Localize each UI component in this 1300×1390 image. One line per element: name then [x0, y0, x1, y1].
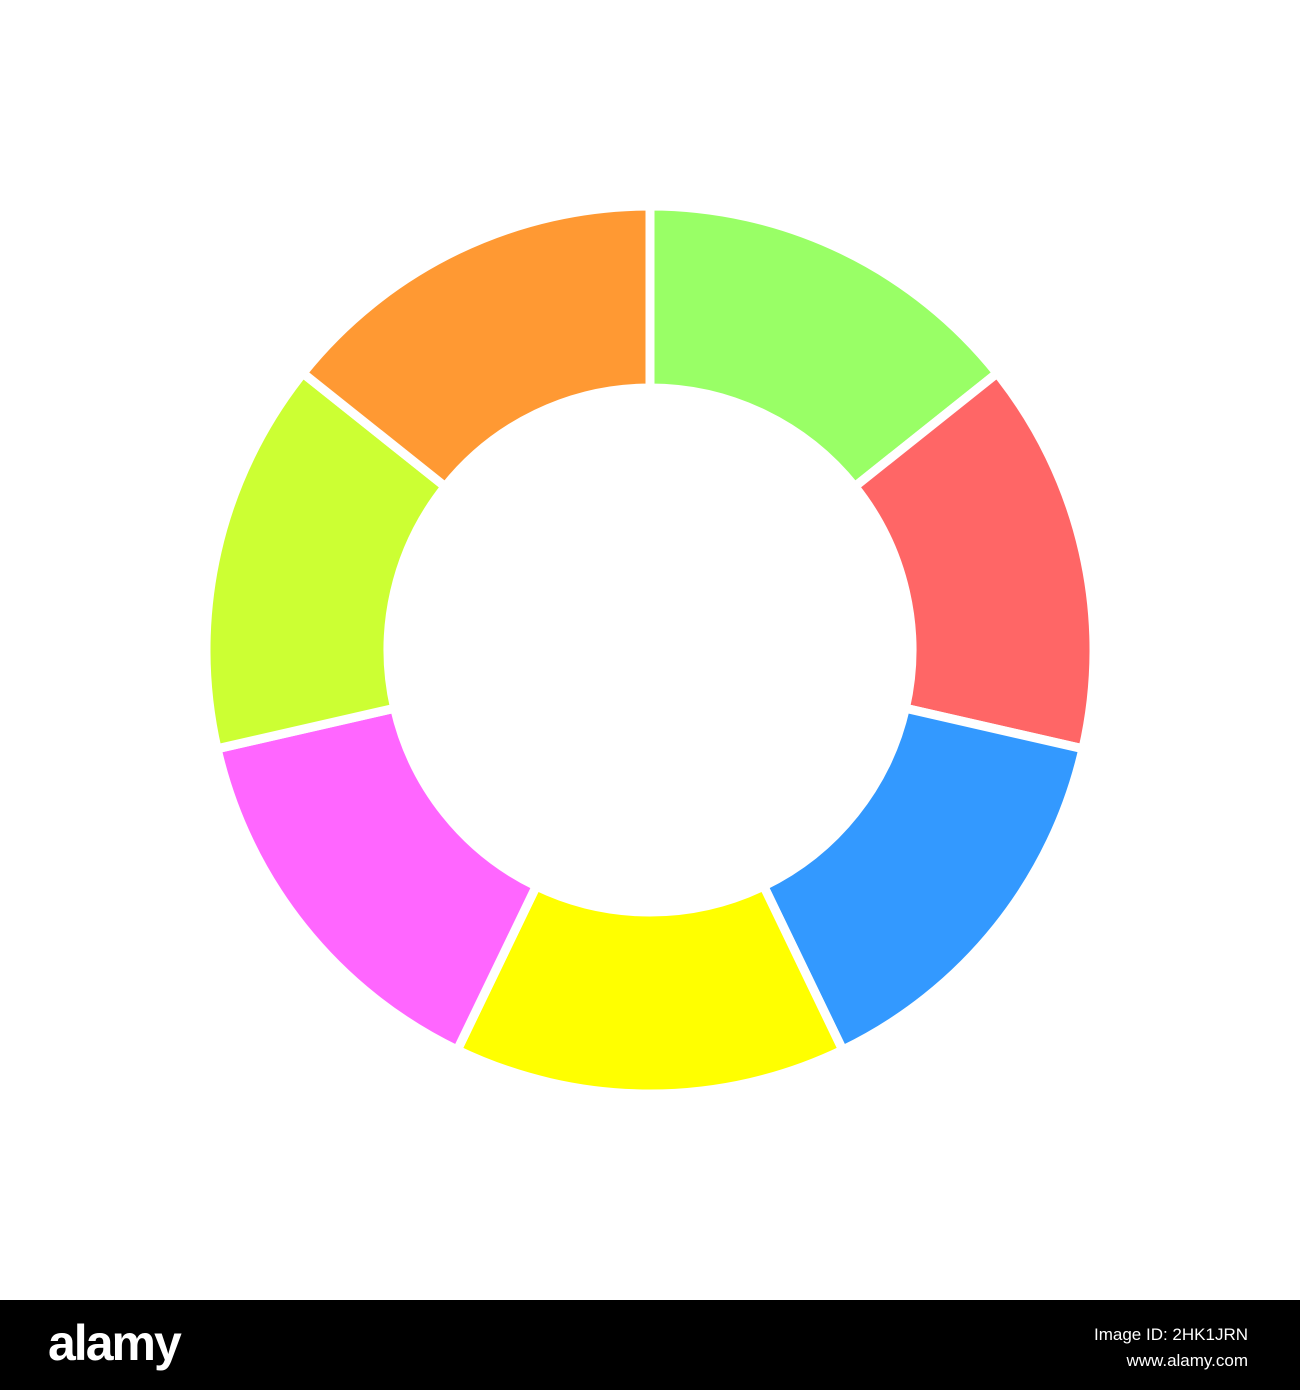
logo text: alamy: [48, 1315, 180, 1371]
segment: red: [855, 373, 1094, 749]
image id text: www.alamy.com: [1126, 1351, 1248, 1370]
segment: green: [650, 206, 997, 487]
segment: magenta: [217, 708, 536, 1050]
segment: orange: [303, 206, 650, 487]
image id text: [1094, 1325, 1248, 1370]
segment: lime: [206, 373, 445, 749]
segment: yellow: [457, 886, 843, 1094]
segment: blue: [764, 708, 1083, 1050]
footer bar: [0, 1300, 1300, 1390]
image id text: Image ID: 2HK1JRN: [1094, 1325, 1248, 1344]
